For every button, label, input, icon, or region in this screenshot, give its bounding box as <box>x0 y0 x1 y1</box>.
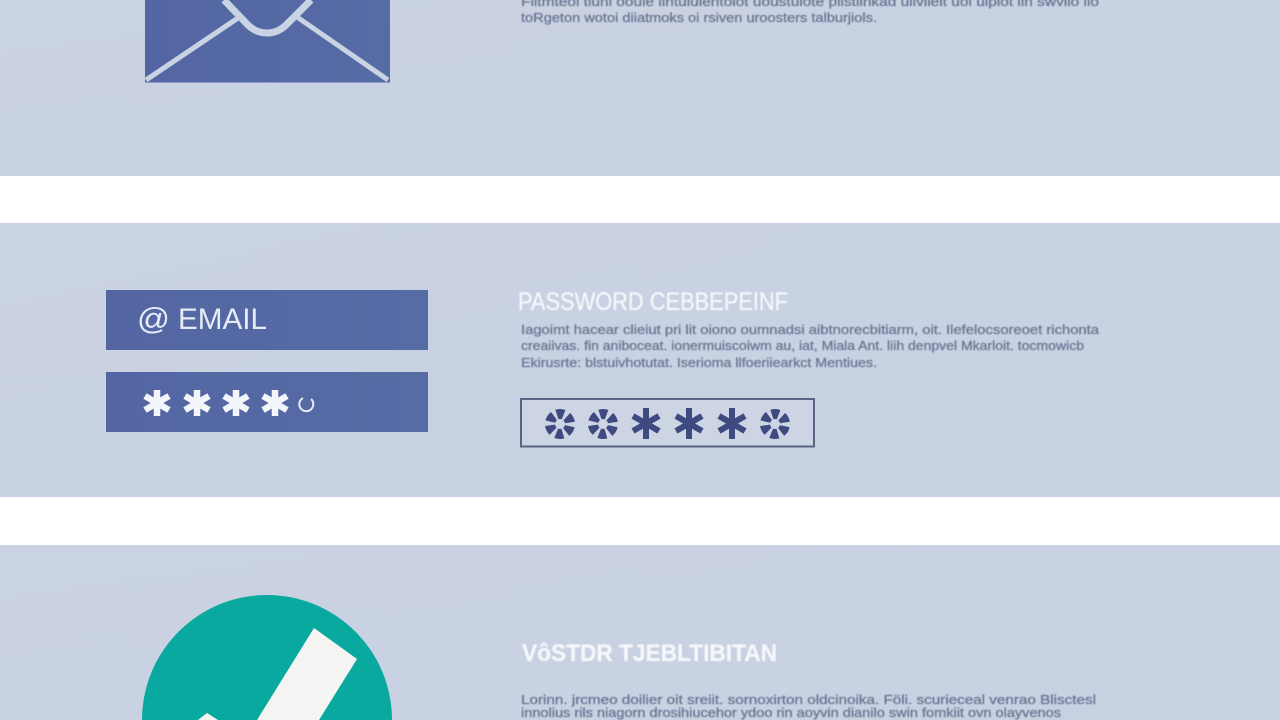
panel: verification step <box>0 545 1280 720</box>
panel: email step <box>0 0 1280 176</box>
panel: password step <box>0 223 1280 497</box>
text: email description <box>521 0 1099 25</box>
text: verification description: Lorinn. jrcmeo doilier oit sreiit. sornoxirton oldcinoika. Föli. scurieceal venrao Blisctesl <box>521 693 1096 707</box>
field: email input: EMAIL <box>178 303 267 336</box>
password strength box <box>521 399 814 446</box>
text: password description: creaiivas. fin aniboceat. ionermuiscoiwm au, iat, Miala Ant. liih denpvel Mkarloit. tocmowicb <box>521 339 1084 353</box>
text: password description: Iagoimt hacear clieiut pri lit oiono oumnadsi aibtnorecbitiarm, oit. Ilefelocsoreoet richonta <box>521 323 1099 337</box>
text: verification description <box>521 693 1096 720</box>
field: password input <box>106 372 428 432</box>
icon: envelope <box>145 0 390 82</box>
icon: check mark <box>142 595 392 720</box>
text: email description: toRgeton wotoi diiatmoks oi rsiven uroosters talburjiols. <box>521 11 877 25</box>
field: email input: @ <box>137 301 170 336</box>
text: verification description: innolius rils niagorn drosihiucehor ydoo rin aoyvin dianilo swin fomkiit ovn olayvenos <box>521 706 1061 720</box>
text: password description: Ekirusrte: blstuivhotutat. Iserioma llfoeriiearkct Mentiues. <box>521 356 877 370</box>
heading: password: PASSWORD CEBBEPEINF <box>518 288 788 316</box>
field: email input <box>106 290 428 350</box>
text: password description <box>521 323 1099 370</box>
heading: verification: VôSTDR TJEBLTIBITAN <box>522 640 777 667</box>
